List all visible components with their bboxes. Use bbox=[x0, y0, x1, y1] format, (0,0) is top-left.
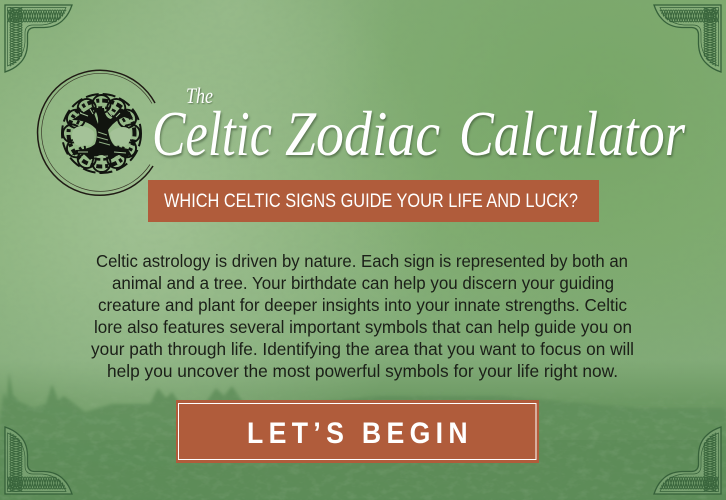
subtitle banner bbox=[148, 180, 599, 222]
title: The: The bbox=[186, 83, 213, 108]
title: Celtic Zodiac Calculator bbox=[152, 98, 686, 169]
intro paragraph: your path through life. Identifying the area that you want to focus on will bbox=[91, 339, 634, 359]
logo inner open ring bbox=[42, 73, 152, 191]
corner ornament: bottom left bbox=[5, 426, 72, 494]
intro paragraph: lore also features several important symbols that can help guide you on bbox=[94, 317, 632, 337]
intro paragraph: creature and plant for deeper insights into your innate strengths. Celtic bbox=[98, 295, 627, 315]
intro paragraph bbox=[91, 251, 634, 381]
title: Celtic Zodiac Calculator: Zodiac bbox=[285, 98, 440, 169]
subtitle banner: WHICH CELTIC SIGNS GUIDE YOUR LIFE AND LUCK? bbox=[164, 191, 578, 212]
tree knot circle bbox=[62, 94, 141, 173]
light openings and trunk highlights bbox=[72, 126, 131, 146]
intro paragraph: animal and a tree. Your birthdate can help you discern your guiding bbox=[112, 273, 614, 293]
corner ornament: top left bbox=[5, 5, 72, 72]
intro paragraph: Celtic astrology is driven by nature. Each sign is represented by both an bbox=[96, 251, 628, 271]
logo: tree of life emblem bbox=[38, 70, 155, 195]
corner ornament: bottom right bbox=[654, 426, 721, 494]
title: Celtic Zodiac Calculator: Celtic bbox=[152, 98, 272, 169]
corner ornament: top right bbox=[654, 5, 721, 72]
intro paragraph: help you uncover the most powerful symbols for your life right now. bbox=[107, 361, 618, 381]
tree trunk, branches and roots bbox=[72, 107, 133, 160]
button: let's begin: LET’S BEGIN bbox=[247, 417, 473, 450]
logo outer open ring bbox=[38, 70, 155, 195]
button: let's begin bbox=[176, 400, 539, 463]
